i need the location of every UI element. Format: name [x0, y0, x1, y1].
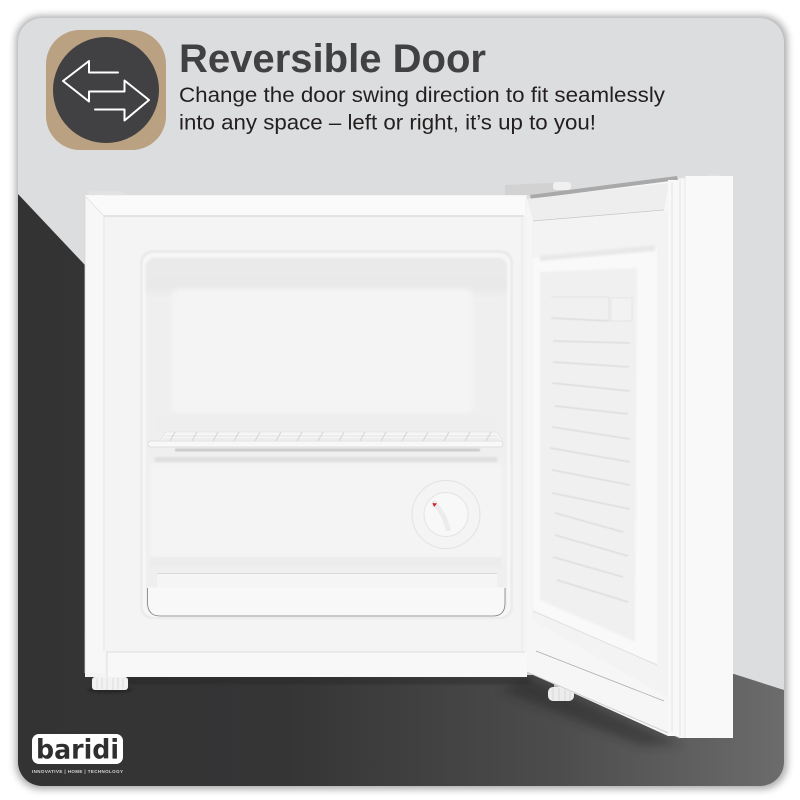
icon: reversible door arrows — [46, 30, 166, 150]
freezer cavity — [140, 250, 513, 619]
brand logo: INNOVATIVE | HOME | TECHNOLOGY — [32, 769, 123, 774]
door side edge — [685, 176, 733, 738]
door top edge — [530, 176, 678, 199]
freezer with open door — [85, 174, 733, 738]
open door — [527, 176, 733, 738]
door side gasket — [668, 180, 685, 736]
door bottom band — [527, 620, 668, 736]
crisper tray — [148, 573, 505, 616]
freezer cabinet body — [85, 195, 527, 677]
brand logo: baridi — [36, 734, 119, 766]
temperature dial — [412, 480, 480, 548]
freezer feet — [88, 677, 574, 701]
top hinge tabs — [88, 174, 723, 195]
wire shelf — [148, 432, 503, 462]
door inner panel — [532, 210, 668, 698]
description text: into any space – left or right, it’s up to you! — [179, 110, 596, 134]
door gasket top band — [527, 183, 669, 221]
door shelf ribs — [550, 318, 630, 602]
description text: Change the door swing direction to fit seamlessly — [179, 83, 665, 107]
title: Reversible Door — [179, 37, 486, 81]
